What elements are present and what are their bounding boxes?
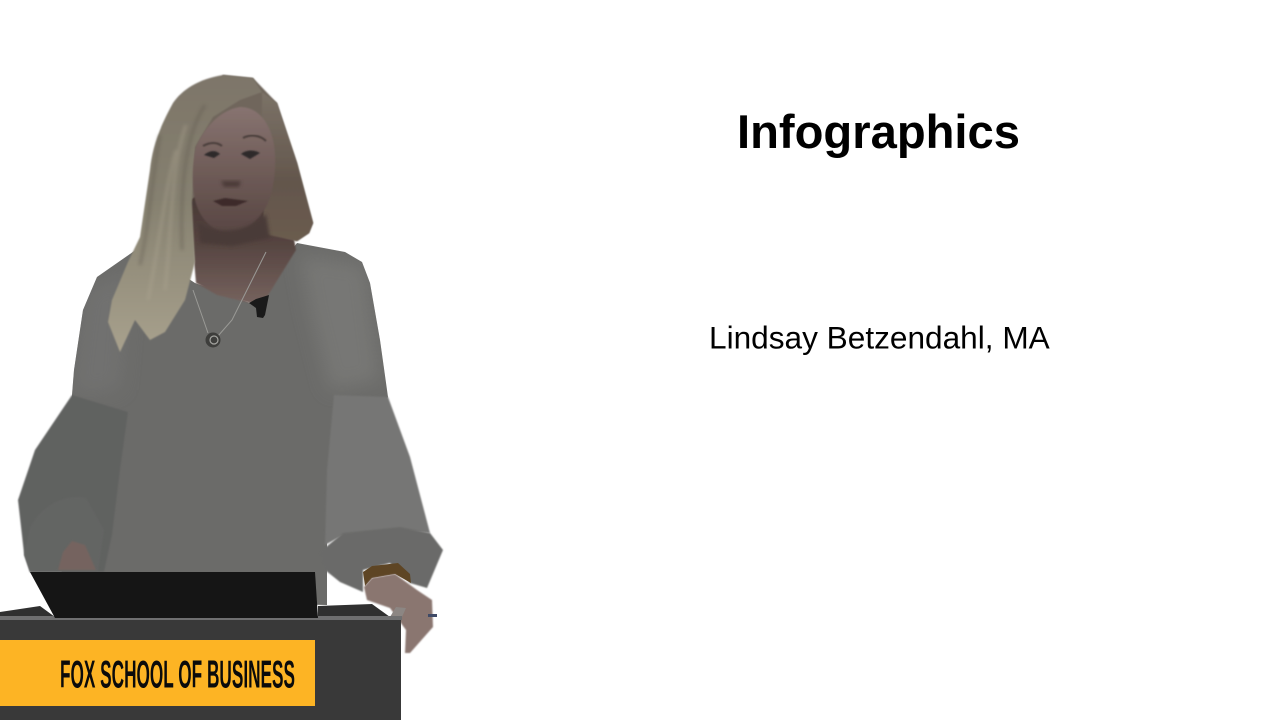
- podium: [0, 604, 406, 720]
- jaw shadow: [198, 214, 270, 246]
- podium rail: [390, 607, 406, 617]
- left hand: [58, 541, 96, 570]
- hair dark strands: [140, 105, 205, 265]
- ring: [428, 614, 437, 617]
- eyes: [204, 150, 260, 159]
- text: FOX SCHOOL OF BUSINESS: [60, 654, 295, 696]
- podium top edge: [0, 616, 402, 620]
- neck and chest: [188, 190, 296, 303]
- hair behind right: [262, 92, 313, 241]
- right hand: [364, 574, 433, 653]
- hair strands: [148, 125, 186, 300]
- banner: Fox School of Business: [0, 640, 315, 706]
- pendant: [206, 332, 220, 348]
- presenter name: Lindsay Betzendahl, MA: [709, 320, 1051, 356]
- hair front: [108, 75, 262, 352]
- hair behind head: [190, 75, 313, 241]
- mouth: [213, 198, 248, 206]
- necklace: [193, 252, 266, 336]
- bracelet: [363, 563, 411, 586]
- nose: [221, 181, 241, 187]
- right sleeve: [325, 395, 430, 545]
- sweater torso: [50, 240, 400, 610]
- presenter photo: [18, 75, 443, 653]
- microphone: [249, 295, 269, 318]
- podium top surface: [0, 604, 390, 617]
- laptop: [30, 572, 318, 618]
- left sleeve: [18, 395, 128, 572]
- title: Infographics: [737, 105, 1020, 158]
- right cuff: [320, 527, 443, 592]
- face: [193, 107, 275, 233]
- brows: [203, 136, 266, 146]
- left cuff: [24, 497, 104, 572]
- podium front: [0, 620, 401, 720]
